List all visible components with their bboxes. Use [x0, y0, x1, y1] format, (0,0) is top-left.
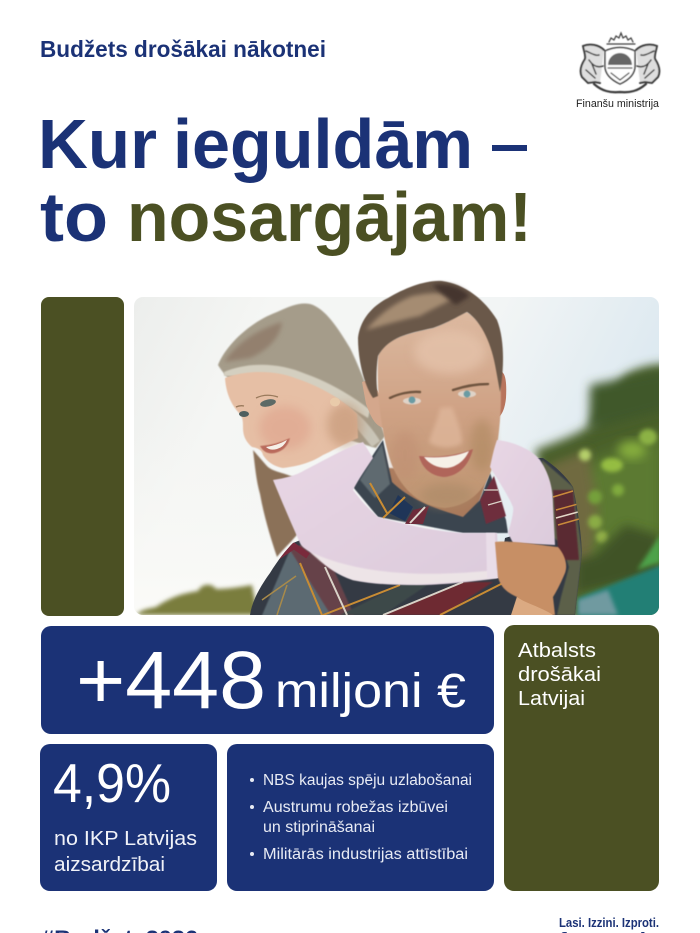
- bullets: un stiprināšanai: [263, 819, 375, 836]
- background trees: [535, 364, 670, 620]
- man hair: [358, 281, 503, 398]
- icon: emblem oak garland: [594, 84, 646, 92]
- background water/teal object: [578, 564, 663, 619]
- man neck: [388, 467, 488, 518]
- title line 2: to: to: [40, 178, 108, 256]
- title line 1: Kur: Kur: [38, 105, 157, 183]
- background bush bottom left: [136, 585, 258, 615]
- panel: +448 miljoni €: [41, 626, 494, 734]
- title: [38, 105, 532, 256]
- title line 1: dash: [492, 145, 527, 151]
- man eyes: [403, 390, 476, 404]
- footer tagline: Lasi. Izzini. Izproti.: [559, 916, 659, 930]
- bullets: [250, 772, 472, 863]
- icon: emblem shield: [605, 48, 635, 84]
- girl hair back: [218, 303, 385, 448]
- percentage caption: [54, 828, 197, 876]
- man shirt: [245, 455, 590, 620]
- man nose: [429, 407, 462, 447]
- panel: bullet list: [227, 744, 494, 891]
- percentage: 4,9%: [53, 752, 171, 814]
- panel: 4,9% no IKP: [40, 744, 217, 891]
- girl hair strands lower: [253, 450, 303, 557]
- icon: emblem stars: [607, 33, 635, 44]
- girl face: [225, 372, 358, 468]
- heading: Budžets drošākai nākotnei: Budžets drošākai nākotnei: [40, 36, 326, 62]
- man collar: [353, 440, 508, 533]
- man face: [378, 312, 501, 508]
- girl smile: [260, 438, 290, 453]
- bullets: NBS kaujas spēju uzlabošanai: [263, 772, 472, 789]
- panel: olive left column: [41, 297, 124, 616]
- panel text: [518, 640, 601, 710]
- panel text: Latvijai: [518, 688, 585, 710]
- man smile: [419, 449, 473, 477]
- logo caption: Finanšu ministrija: [576, 98, 660, 110]
- panel text: drošākai: [518, 664, 601, 686]
- percentage caption: no IKP Latvijas: [54, 828, 197, 850]
- panel text: Atbalsts: [518, 640, 596, 662]
- icon: emblem lions: [581, 45, 659, 83]
- percentage caption: aizsardzībai: [54, 854, 165, 876]
- girl far arm around neck: [490, 440, 555, 545]
- bullets: Austrumu robežas izbūvei: [263, 799, 448, 816]
- girl sweater: [273, 442, 499, 585]
- logo: Finanšu ministrija coat of arms: [581, 33, 659, 92]
- title line 2: nosargājam!: nosargājam!: [127, 178, 532, 256]
- photo background: [134, 297, 670, 620]
- clasped hands: [495, 542, 566, 615]
- man ears: [362, 381, 384, 428]
- photo: father carrying daughter: [134, 281, 670, 620]
- panel: Atbalsts drošākai Latvijai: [504, 625, 659, 891]
- big number: +448: [76, 635, 266, 726]
- man eyebrows: [390, 384, 488, 398]
- girl eyes: [260, 399, 276, 407]
- people: [218, 281, 590, 620]
- title line 1: ieguldām: ieguldām: [173, 105, 473, 183]
- bullets: Militārās industrijas attīstībai: [263, 846, 468, 863]
- unit: miljoni €: [275, 665, 466, 718]
